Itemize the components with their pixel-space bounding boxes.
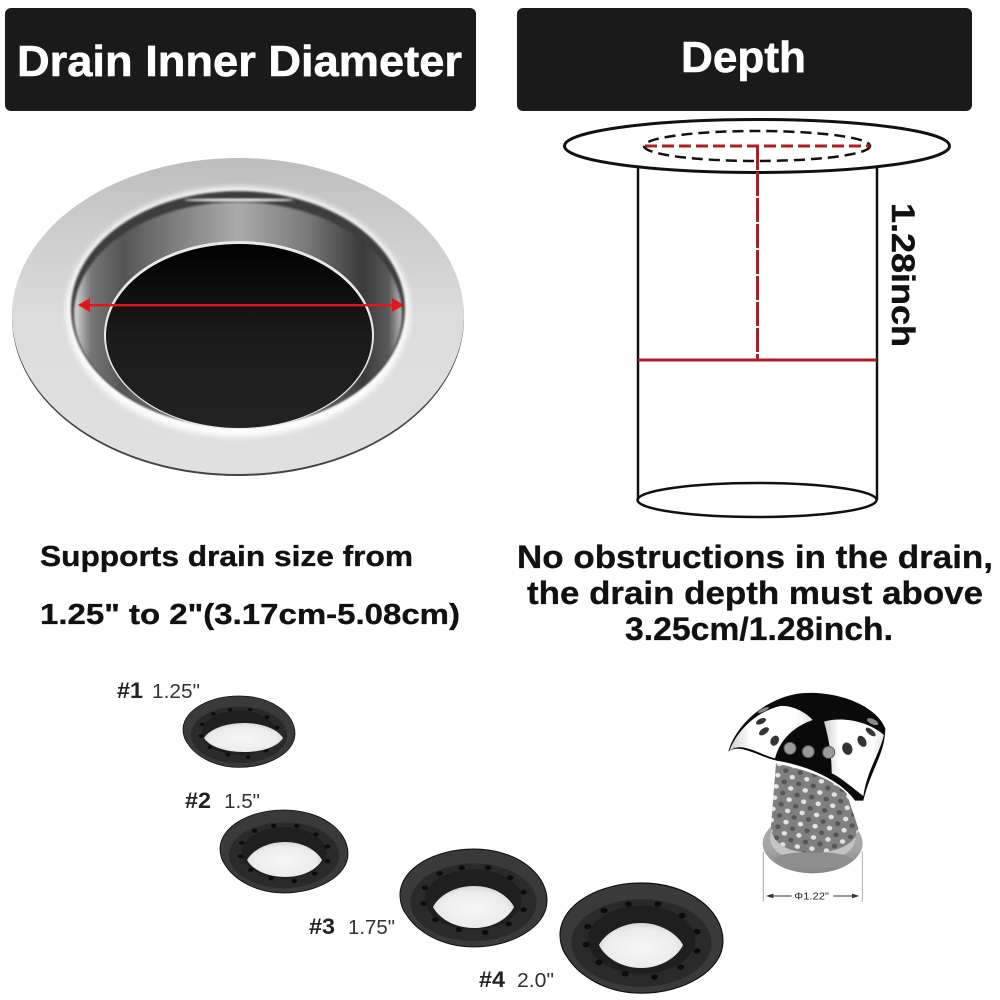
- dimension: strainer diameter: Φ1.22": [794, 891, 829, 902]
- text: depth requirement: No obstructions in the drain,: [517, 539, 993, 575]
- label: #1 1.25: 1.25": [152, 681, 200, 703]
- strainer base: [763, 813, 863, 873]
- text: depth requirement: 3.25cm/1.28inch.: [625, 611, 893, 647]
- strainer dome: [728, 693, 885, 801]
- dimension: strainer diameter: [763, 852, 862, 902]
- text: supported drain size: Supports drain size from: [40, 541, 413, 573]
- label: #3 1.75: 1.75": [348, 917, 395, 939]
- label: #1 1.25: [117, 678, 200, 703]
- dimension arrow: inner diameter: [78, 298, 404, 312]
- adapter ring #4: [560, 883, 723, 993]
- heading: drain inner diameter: [5, 8, 476, 111]
- label: #2 1.5: 1.5": [224, 791, 260, 813]
- adapter ring #3: [400, 849, 547, 947]
- text: supported drain size: [40, 541, 460, 631]
- product: hair catcher strainer: [728, 693, 885, 902]
- label: #2 1.5: [185, 788, 260, 813]
- diagram: drain depth cylinder: [564, 120, 950, 517]
- label: #1 1.25: #1: [117, 678, 143, 703]
- label: #3 1.75: #3: [309, 914, 335, 939]
- label: #4 2.0: 2.0": [517, 970, 554, 992]
- heading: depth: [517, 8, 972, 111]
- adapter ring #2: [220, 810, 348, 893]
- text: supported drain size: 1.25" to 2"(3.17cm-5.08cm): [40, 599, 460, 631]
- text: depth requirement: [517, 539, 993, 647]
- heading: drain inner diameter: Drain Inner Diameter: [17, 37, 462, 86]
- strainer mesh basket: [771, 763, 858, 853]
- illustration: steel drain flange: [12, 158, 464, 476]
- heading: depth: Depth: [681, 33, 806, 82]
- label: #2 1.5: #2: [185, 788, 211, 813]
- label: depth measurement: 1.28inch: [885, 203, 921, 347]
- label: #4 2.0: #4: [479, 967, 506, 992]
- label: #4 2.0: [479, 967, 554, 992]
- text: depth requirement: the drain depth must above: [527, 575, 983, 611]
- adapter ring #1: [183, 696, 295, 767]
- label: #3 1.75: [309, 914, 395, 939]
